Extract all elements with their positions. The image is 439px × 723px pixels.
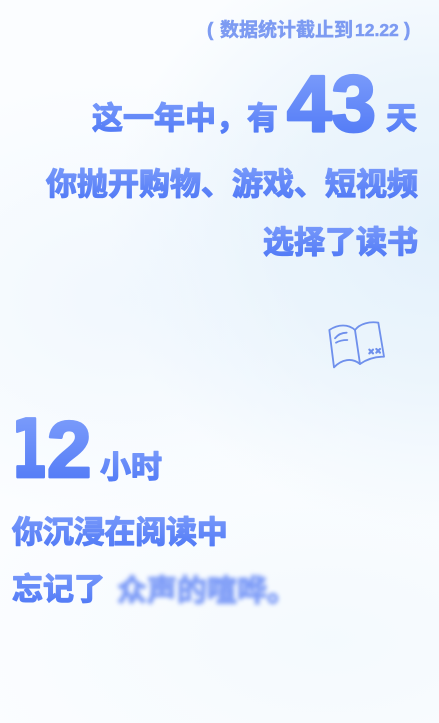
headline lead text: 这一年中，有 xyxy=(92,93,278,138)
blurred text: the noise of the crowd: 众声的喧哗。 xyxy=(117,566,297,610)
headline: days of reading xyxy=(92,59,417,148)
unit: hours: 小时 xyxy=(100,442,162,487)
big number 43: 43 xyxy=(287,59,376,148)
big number 12 xyxy=(11,403,92,496)
date note: 数据统计截止到 xyxy=(220,15,353,42)
date note: ( xyxy=(207,20,214,41)
big number 12: 2 xyxy=(47,405,92,494)
date note: ) xyxy=(404,20,410,41)
text: gave up shopping, games, short video: 你抛开购物、游戏、短视频 xyxy=(46,159,418,204)
text: forgot: 忘记了 xyxy=(12,564,105,609)
stat: 12 hours xyxy=(11,403,162,496)
text: chose reading: 选择了读书 xyxy=(263,217,418,262)
big number 12: 1 xyxy=(11,403,48,496)
icon: open book xyxy=(329,322,384,367)
date note: 12.22 xyxy=(355,20,399,40)
unit: days: 天 xyxy=(386,93,417,138)
text: immersed in reading: 你沉浸在阅读中 xyxy=(12,507,228,552)
